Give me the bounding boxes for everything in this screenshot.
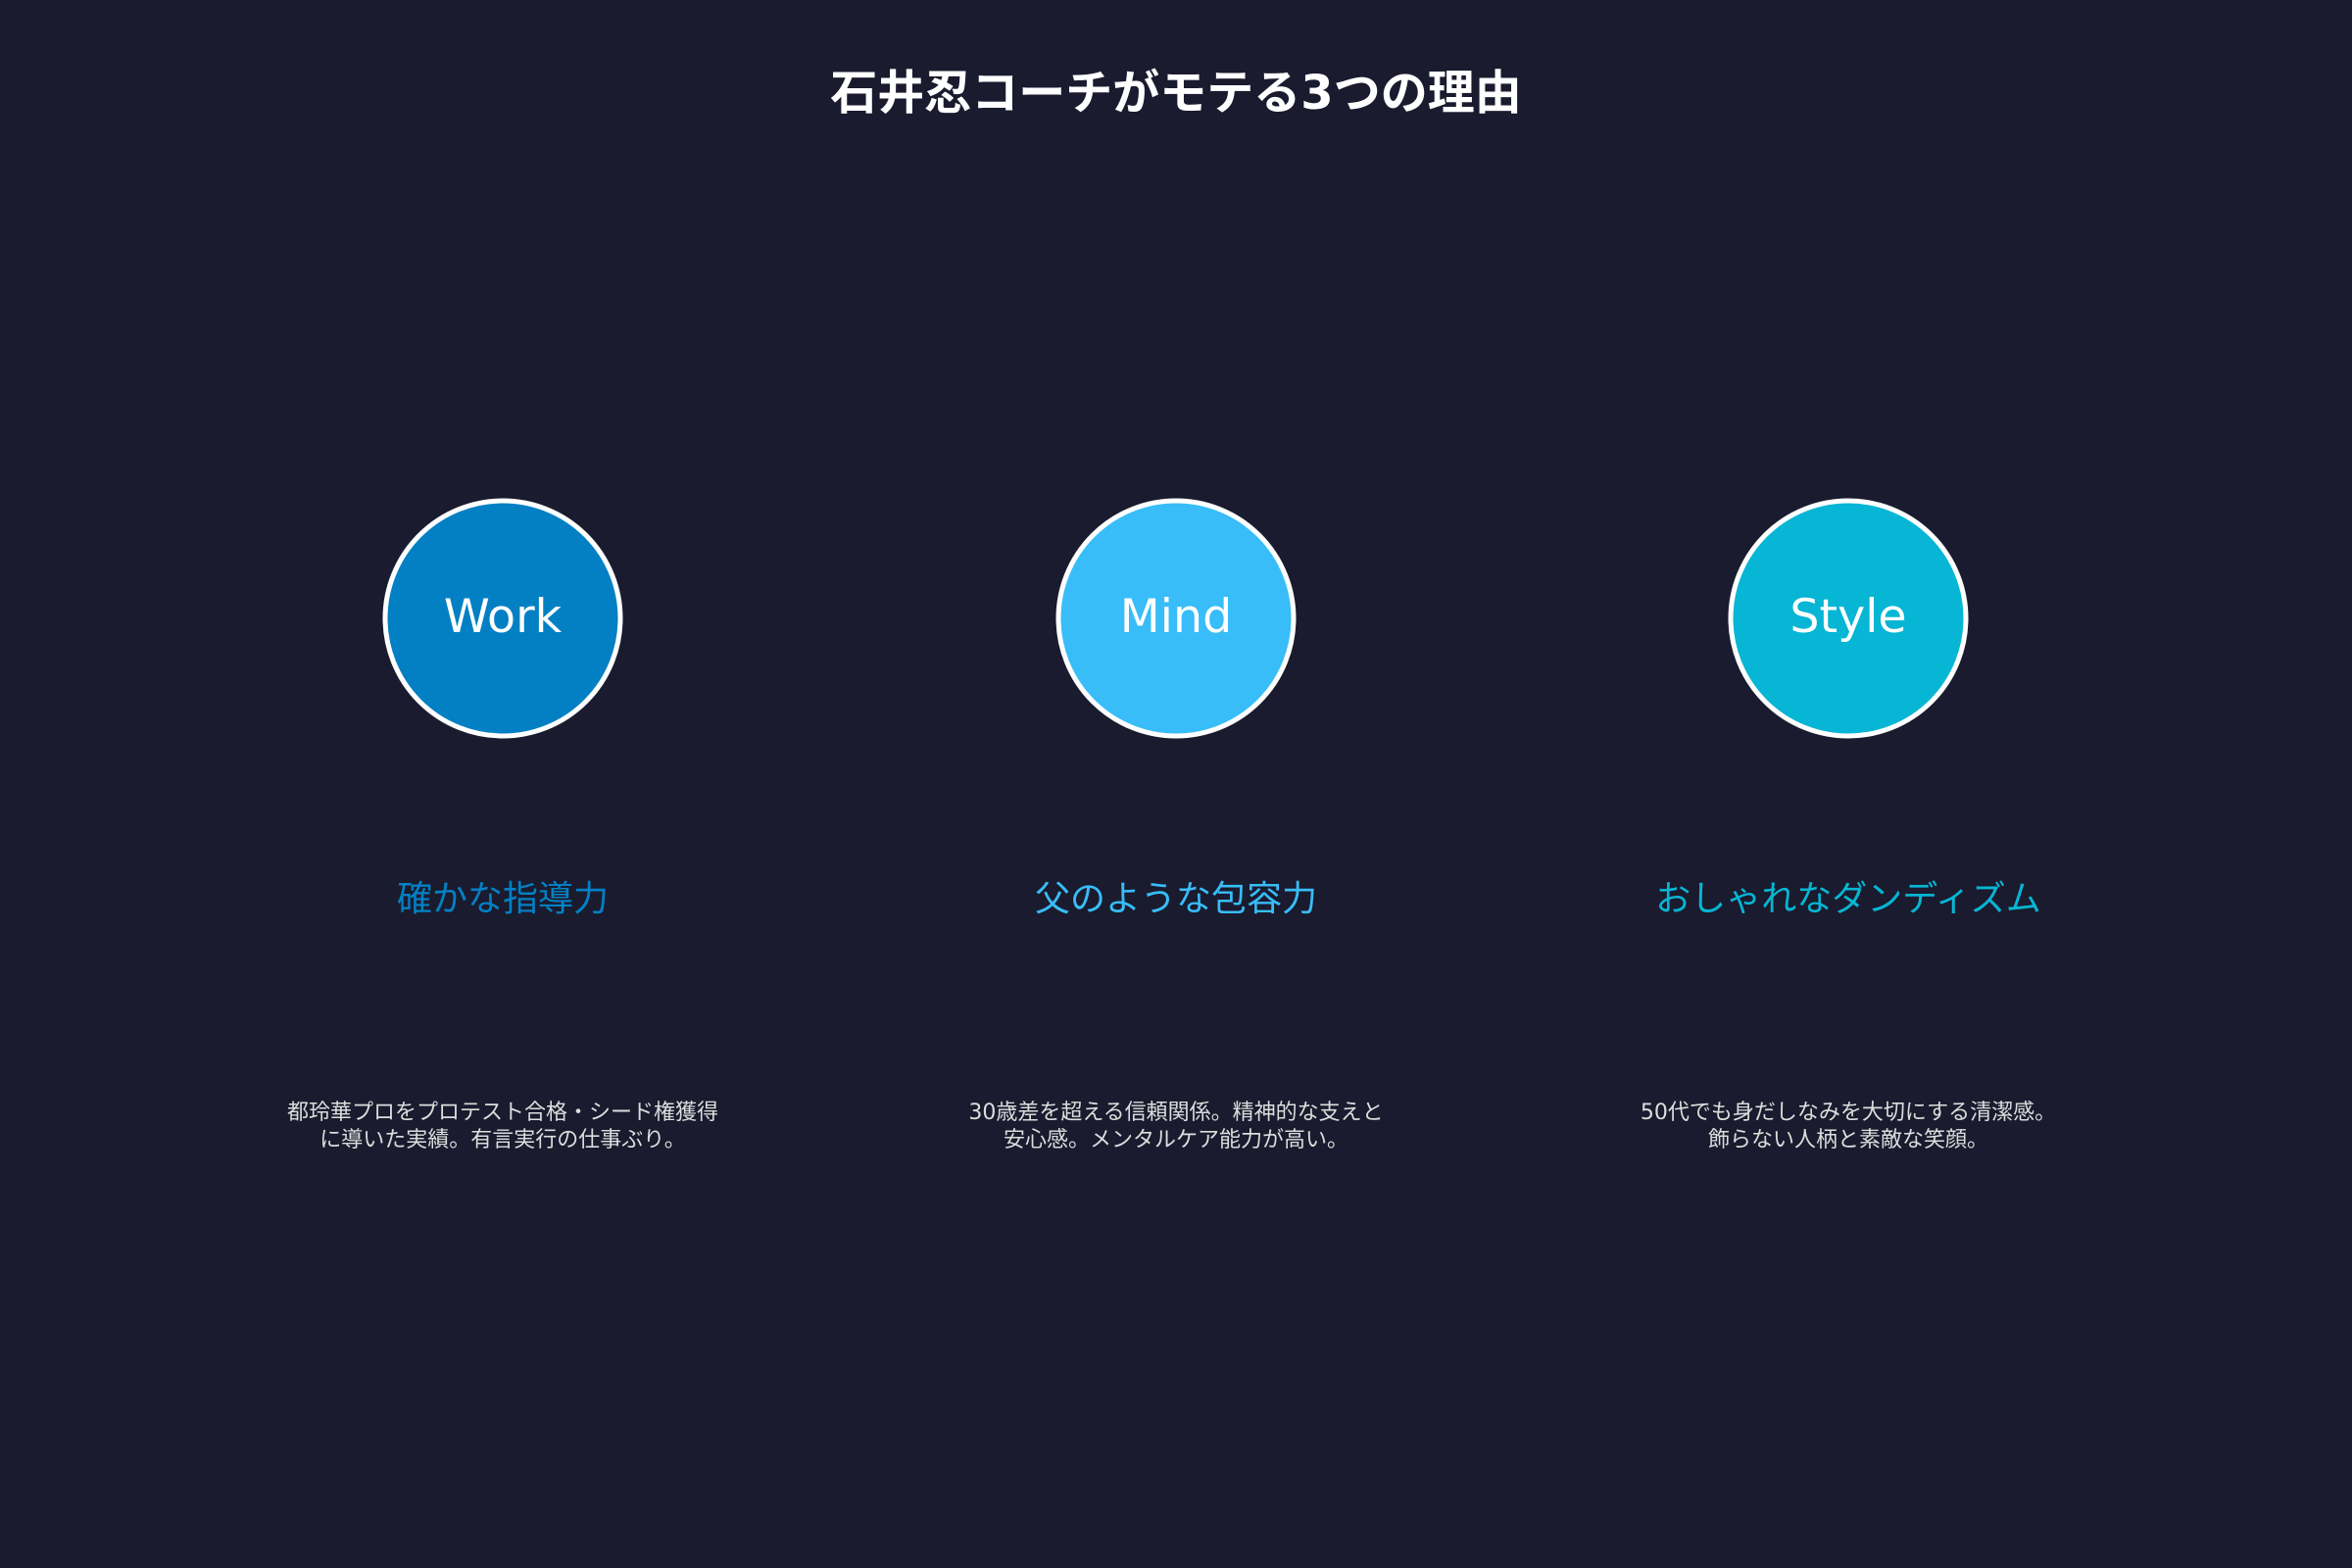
heading: Style: おしゃれなダンディズム bbox=[1655, 879, 2041, 919]
icon: Style circle bbox=[1731, 501, 1966, 736]
icon: Mind circle: Mind bbox=[1120, 590, 1232, 644]
text block: Style: 飾らない人柄と素敵な笑顔。 bbox=[1708, 1128, 1988, 1152]
icon: Work circle bbox=[385, 501, 620, 736]
icon: Mind circle bbox=[1058, 501, 1294, 736]
panel: Style bbox=[1641, 501, 2056, 1152]
text block: Mind: 安心感。メンタルケア能力が高い。 bbox=[1004, 1128, 1348, 1152]
text block: Work: に導いた実績。有言実行の仕事ぶり。 bbox=[319, 1128, 686, 1152]
text block: Style: 50代でも身だしなみを大切にする清潔感。 bbox=[1641, 1101, 2056, 1125]
panel: Mind bbox=[968, 501, 1384, 1152]
title: 石井忍コーチがモテる3つの理由 bbox=[830, 66, 1522, 121]
panel: Work bbox=[287, 501, 718, 1152]
text block: Mind: 30歳差を超える信頼関係。精神的な支えと bbox=[968, 1101, 1384, 1125]
heading: Mind: 父のような包容力 bbox=[1035, 879, 1317, 919]
icon: Work circle: Work bbox=[444, 590, 563, 644]
heading: Work: 確かな指導力 bbox=[397, 879, 609, 919]
icon: Style circle: Style bbox=[1789, 590, 1907, 644]
text block: Work: 都玲華プロをプロテスト合格・シード権獲得 bbox=[287, 1101, 718, 1125]
